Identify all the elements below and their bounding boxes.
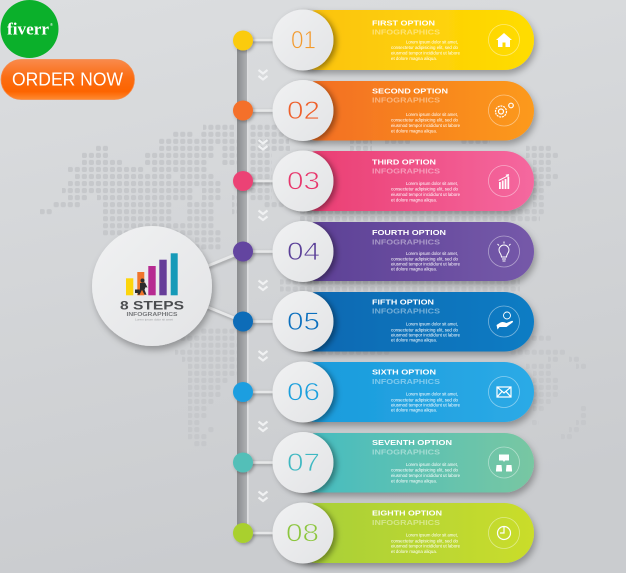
panel: second option: INFOGRAPHICS — [372, 96, 440, 105]
panel: third option: eiusmod tempor incididunt ut labore — [391, 192, 460, 197]
panel: first option: INFOGRAPHICS — [372, 28, 440, 37]
panel: third option — [272, 150, 534, 212]
panel: second option: consectetur adipisicing elit, sed do — [391, 118, 458, 123]
panel: seventh option: INFOGRAPHICS — [372, 447, 440, 456]
panel: second option — [272, 80, 534, 141]
panel: seventh option: et dolore magna aliqua. — [391, 478, 437, 483]
panel: fourth option — [272, 221, 534, 282]
icon: people talking — [496, 454, 512, 472]
panel: eighth option: et dolore magna aliqua. — [391, 549, 437, 554]
panel: fifth option: consectetur adipisicing elit, sed do — [391, 327, 458, 332]
icon: envelope — [497, 387, 511, 397]
panel: sixth option — [272, 362, 534, 422]
panel: first option: consectetur adipisicing elit, sed do — [391, 45, 458, 50]
panel: fifth option: FIFTH OPTION — [372, 297, 434, 306]
panel: sixth option: INFOGRAPHICS — [372, 377, 440, 386]
timeline nodes — [233, 30, 253, 543]
panel: fifth option: et dolore magna aliqua. — [391, 338, 437, 343]
panel: third option: INFOGRAPHICS — [372, 167, 440, 176]
panel: fifth option: INFOGRAPHICS — [372, 307, 440, 316]
panel: sixth option: consectetur adipisicing elit, sed do — [391, 397, 458, 402]
panel: third option: THIRD OPTION — [372, 157, 436, 166]
bar chart logo — [126, 253, 178, 295]
logo tagline: Lorem ipsum dolor sit amet — [135, 318, 173, 322]
panel: eighth option: EIGHTH OPTION — [372, 509, 442, 518]
panel: seventh option: SEVENTH OPTION — [372, 438, 452, 447]
panel: seventh option: Lorem ipsum dolor sit amet, — [406, 462, 458, 467]
panel: fifth option: 05 — [287, 308, 320, 336]
icon: light bulb — [498, 242, 510, 261]
panel: seventh option: consectetur adipisicing elit, sed do — [391, 468, 458, 473]
panel: second option: SECOND OPTION — [372, 86, 448, 95]
icon: home — [496, 33, 512, 47]
panel: third option: 03 — [287, 168, 320, 196]
icon: growth chart — [498, 174, 509, 189]
panel: eighth option: 08 — [286, 520, 319, 548]
panel: first option — [272, 10, 534, 70]
logo title: 8 STEPS — [120, 298, 184, 312]
panel: seventh option: 07 — [287, 449, 320, 477]
panel: sixth option: 06 — [287, 378, 320, 406]
fiverr badge — [0, 0, 58, 58]
icon: gears — [496, 103, 513, 117]
panel: eighth option: eiusmod tempor incididunt ut labore — [391, 544, 460, 549]
fiverr badge: ® — [50, 22, 53, 27]
order now button: ORDER NOW — [12, 68, 123, 90]
order now button — [1, 60, 134, 100]
panel: fourth option: FOURTH OPTION — [372, 228, 446, 237]
chevrons — [258, 70, 268, 501]
panel: fifth option: eiusmod tempor incididunt ut labore — [391, 333, 460, 338]
panel: fourth option: Lorem ipsum dolor sit amet, — [406, 251, 458, 256]
panel: fourth option: INFOGRAPHICS — [372, 237, 440, 246]
panel: sixth option: SIXTH OPTION — [372, 368, 436, 377]
panel: seventh option: eiusmod tempor incididunt ut labore — [391, 473, 460, 478]
panel: second option: 02 — [287, 97, 320, 125]
icon: hand with coin — [496, 312, 513, 330]
panel: fifth option: Lorem ipsum dolor sit amet, — [406, 322, 458, 327]
central circle — [92, 226, 212, 346]
panel: fifth option — [272, 291, 534, 352]
panel: sixth option: et dolore magna aliqua. — [391, 408, 437, 413]
panel: first option: et dolore magna aliqua. — [391, 56, 437, 61]
panel: eighth option: Lorem ipsum dolor sit amet, — [406, 533, 458, 538]
panel: third option: Lorem ipsum dolor sit amet, — [406, 181, 458, 186]
panel: eighth option: INFOGRAPHICS — [372, 518, 440, 527]
panel: fourth option: 04 — [287, 238, 320, 266]
timeline spine — [237, 40, 249, 533]
panel: second option: et dolore magna aliqua. — [391, 128, 437, 133]
logo subtitle: INFOGRAPHICS — [126, 312, 178, 318]
panel: second option: eiusmod tempor incididunt ut labore — [391, 123, 460, 128]
panel: sixth option: eiusmod tempor incididunt ut labore — [391, 403, 460, 408]
dotted world map — [40, 124, 587, 447]
panel: second option: Lorem ipsum dolor sit amet, — [406, 112, 458, 117]
panel: seventh option — [272, 432, 534, 493]
panel: fourth option: et dolore magna aliqua. — [391, 267, 437, 272]
panel: fourth option: eiusmod tempor incididunt ut labore — [391, 262, 460, 267]
icon: clock — [498, 526, 510, 540]
panel: fourth option: consectetur adipisicing elit, sed do — [391, 256, 458, 261]
panel: first option: FIRST OPTION — [372, 18, 435, 27]
panel: eighth option — [272, 502, 534, 564]
panel: first option: 01 — [291, 26, 316, 54]
fiverr badge: fiverr — [7, 20, 49, 38]
panel: first option: Lorem ipsum dolor sit amet, — [406, 40, 458, 45]
panel: third option: et dolore magna aliqua. — [391, 197, 437, 202]
panel: eighth option: consectetur adipisicing elit, sed do — [391, 538, 458, 543]
panel: third option: consectetur adipisicing elit, sed do — [391, 187, 458, 192]
panel: first option: eiusmod tempor incididunt ut labore — [391, 50, 460, 56]
panel: sixth option: Lorem ipsum dolor sit amet, — [406, 392, 458, 397]
connectors — [205, 40, 280, 533]
